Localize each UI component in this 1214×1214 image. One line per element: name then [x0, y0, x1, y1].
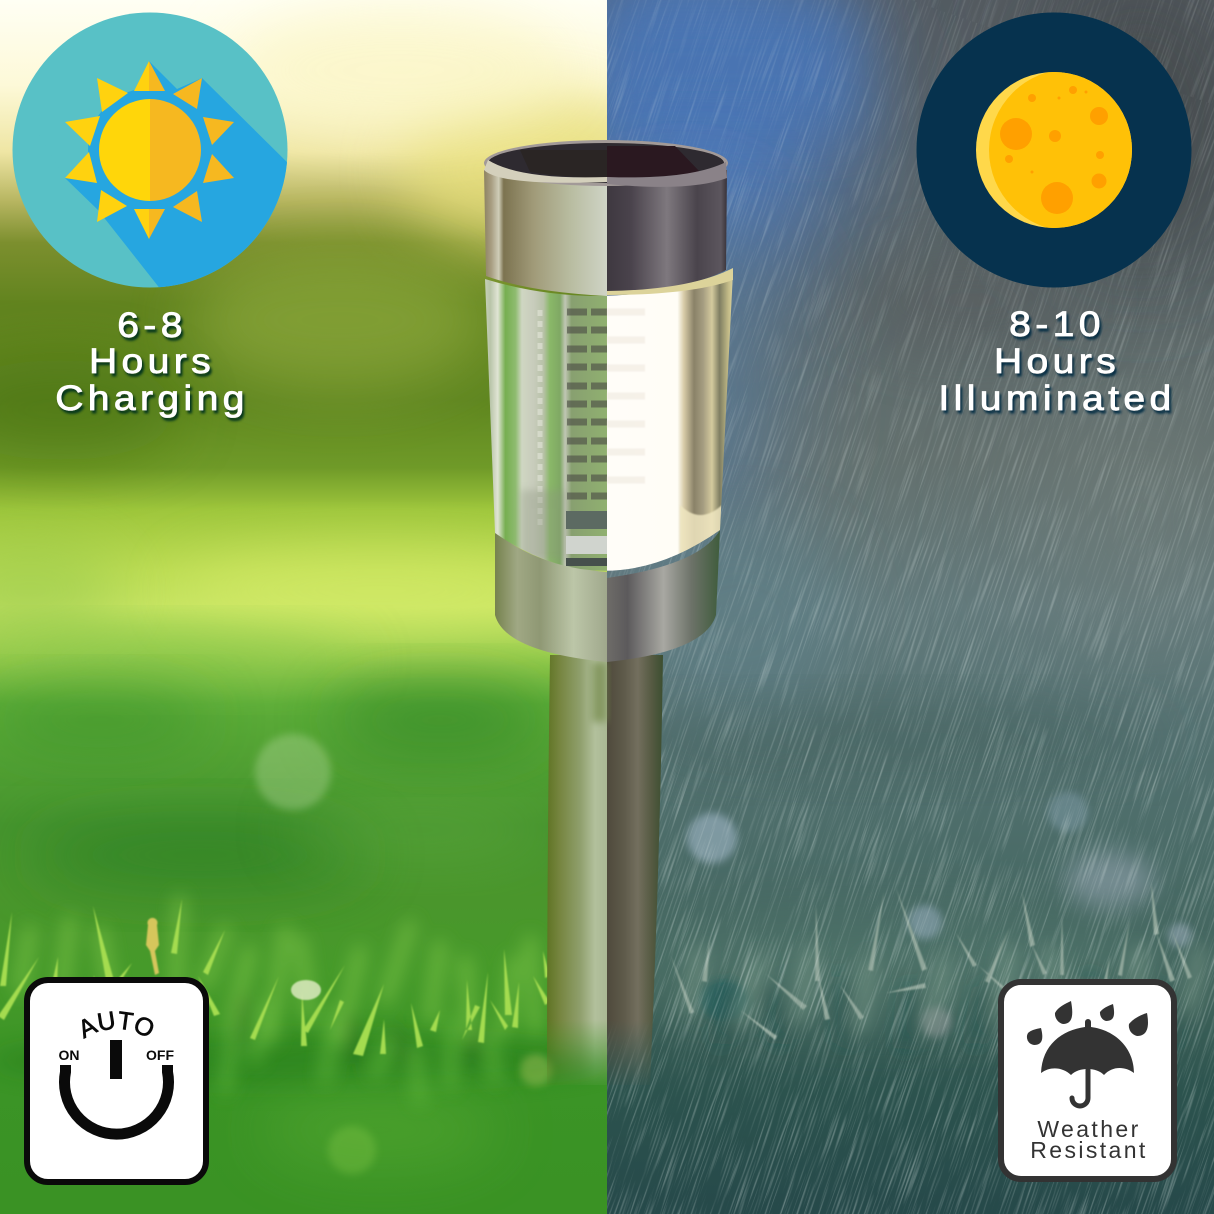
charging label: Hours — [89, 341, 215, 381]
power symbol — [64, 1040, 168, 1134]
icon: weather resistant badge — [1001, 982, 1174, 1179]
illumination label — [938, 304, 1176, 418]
lamp steel top cap — [484, 170, 733, 296]
charging label: 6-8 — [117, 305, 187, 345]
grass blades, sharp on the left — [0, 899, 550, 1056]
lamp glass cylinder — [485, 279, 733, 571]
seed head — [146, 918, 159, 975]
illumination label: 8-10 — [1009, 304, 1105, 344]
off label: OFF — [146, 1047, 174, 1063]
umbrella — [1041, 1019, 1134, 1106]
on label: ON — [58, 1047, 80, 1063]
icon: moon night badge — [916, 12, 1192, 288]
lamp base collar — [495, 530, 720, 662]
rain drops — [1027, 1001, 1148, 1045]
charging label: Charging — [55, 378, 249, 418]
solar stake lamp — [480, 140, 735, 1085]
solar panel top — [484, 140, 728, 187]
clover flower — [291, 980, 321, 1000]
grass clumps, soft foliage on the right — [690, 950, 1200, 1045]
grass blades, sharp on the right — [671, 881, 1192, 1040]
icon: auto on/off badge — [24, 977, 209, 1185]
panel: rainy night background — [550, 0, 1214, 1214]
icon: sun charging badge — [12, 12, 295, 295]
charging label — [55, 305, 249, 418]
weather resistant text — [1030, 1116, 1148, 1163]
illumination label: Illuminated — [938, 378, 1176, 418]
rain streaks — [607, 0, 1214, 1214]
auto text: AUTO — [82, 1011, 154, 1040]
grass clumps, soft foliage on the left — [20, 900, 535, 1100]
lamp stake — [547, 655, 663, 1085]
panel: sunny daytime garden background — [0, 0, 660, 1214]
rib pattern — [567, 312, 607, 496]
weather resistant text: Resistant — [1030, 1137, 1148, 1163]
weather resistant text: Weather — [1037, 1116, 1141, 1142]
illumination label: Hours — [994, 341, 1120, 381]
